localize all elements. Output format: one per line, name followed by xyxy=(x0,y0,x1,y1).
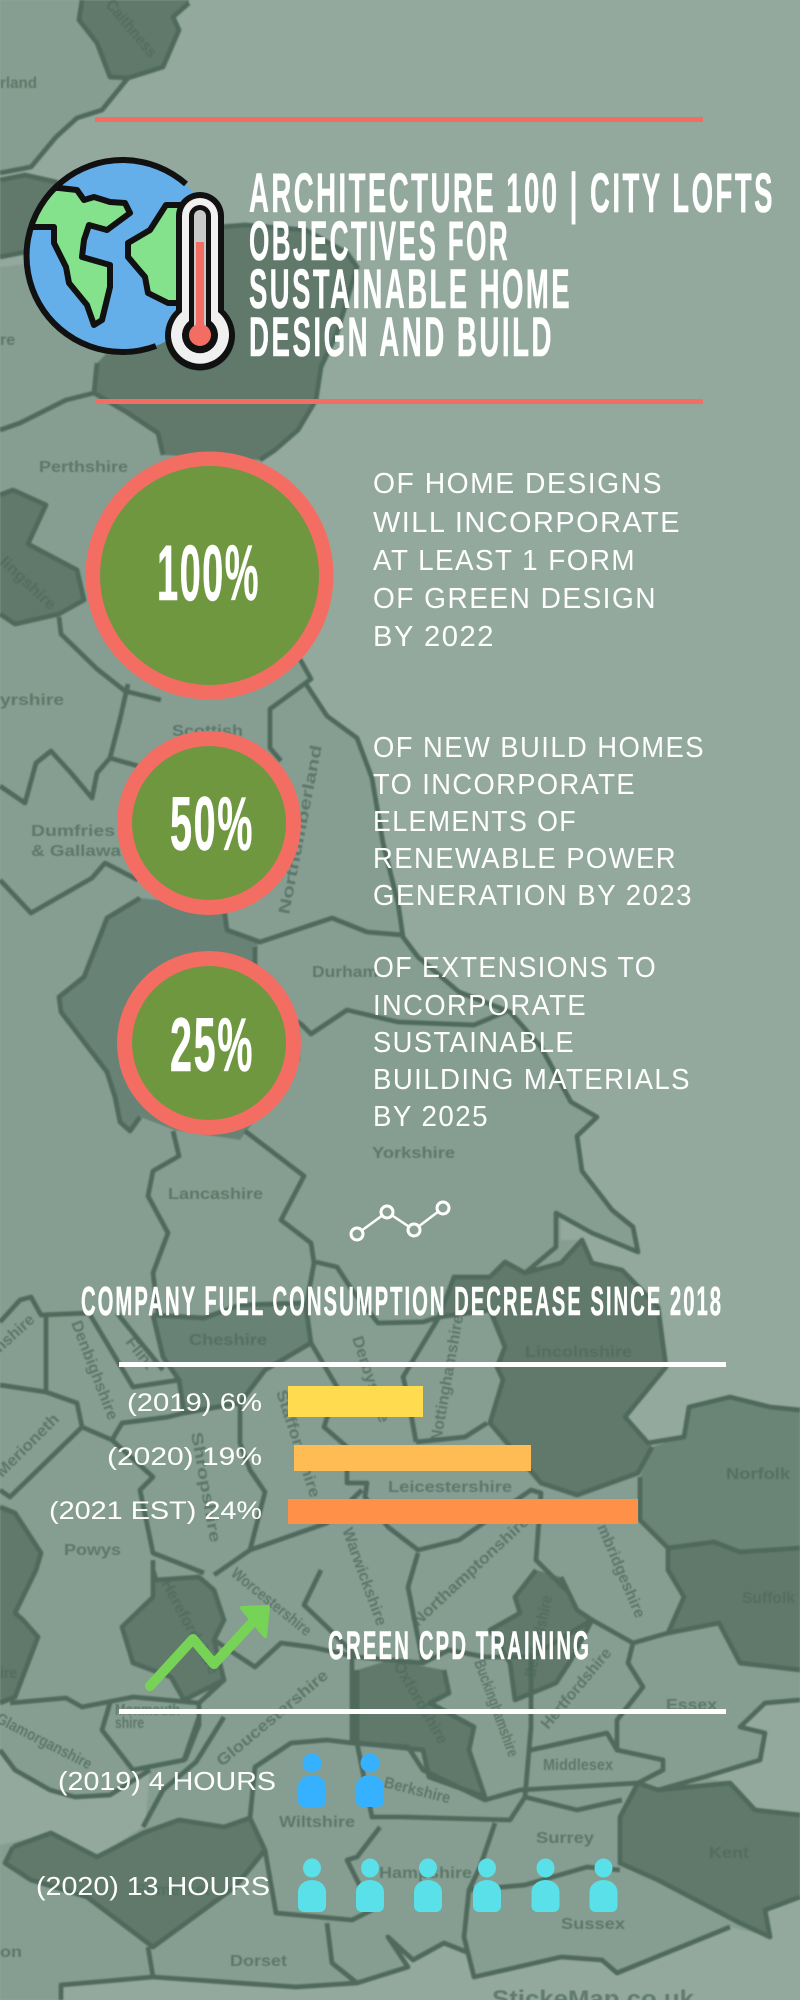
bar label 2021: (2021 EST) 24% xyxy=(49,1497,262,1525)
stat text: 50% xyxy=(373,732,705,912)
map place names: Norfolk xyxy=(726,1466,790,1483)
icon: globe with thermometer xyxy=(20,160,235,370)
bar chart: fuel consumption xyxy=(49,1386,638,1525)
stat text: 50%: TO INCORPORATE xyxy=(373,769,636,801)
stat text: 100%: OF HOME DESIGNS xyxy=(373,468,663,500)
map place names: Northumberland xyxy=(276,744,326,916)
stat text: 25%: OF EXTENSIONS TO xyxy=(373,952,657,984)
bar label 2019: (2019) 6% xyxy=(127,1389,262,1417)
North sea xyxy=(0,0,800,1443)
map place names: Durham xyxy=(312,964,378,981)
map place names: Middlesex xyxy=(543,1757,613,1774)
map place names: Suffolk xyxy=(742,1590,795,1607)
stat text: 25%: INCORPORATE xyxy=(373,990,587,1022)
map place names: Yorkshire xyxy=(372,1145,455,1162)
map place names: Oxfordshire xyxy=(390,1658,451,1748)
icon: line chart xyxy=(351,1202,449,1240)
white divider xyxy=(119,1362,726,1367)
map place names: Flint xyxy=(122,1334,158,1373)
map place names: Derbyshire xyxy=(348,1334,392,1425)
map place names: Kent xyxy=(709,1845,750,1862)
bottom red divider xyxy=(95,399,703,404)
icons: people 2020 xyxy=(298,1858,618,1912)
map place names: Warwickshire xyxy=(338,1526,389,1628)
bar 2019 xyxy=(288,1386,423,1417)
map place names: Lincolnshire xyxy=(525,1344,632,1361)
title: OBJECTIVES FOR xyxy=(249,209,510,272)
map place names: rland xyxy=(0,75,37,92)
map place names: Powys xyxy=(64,1542,121,1559)
map place names: Surrey xyxy=(536,1830,594,1847)
map place names: Essex xyxy=(666,1697,717,1714)
stat circle: 50%: 50% xyxy=(170,782,254,867)
stat text: 50%: ELEMENTS OF xyxy=(373,806,577,838)
stat text: 50%: OF NEW BUILD HOMES xyxy=(373,732,705,764)
stat circle: 25% xyxy=(117,951,301,1135)
map place names: re xyxy=(0,332,15,349)
stat circle: 25%: 25% xyxy=(170,1003,254,1088)
map place names: yrshire xyxy=(0,692,64,709)
stat text: 25%: BY 2025 xyxy=(373,1101,489,1133)
map place names: Buckinghamshire xyxy=(470,1658,521,1759)
icon: rising green arrow xyxy=(150,1607,268,1686)
map place names: Bedfordshire xyxy=(522,1594,556,1679)
map place names: Leicestershire xyxy=(388,1479,512,1496)
stat text: 100%: WILL INCORPORATE xyxy=(373,507,681,539)
map place names: mbridgeshire xyxy=(593,1522,648,1621)
map place names: Hampshire xyxy=(379,1865,472,1882)
map place names: Worcestershire xyxy=(227,1565,314,1640)
map place names: Scottish xyxy=(172,723,243,740)
stat circle: 100%: 100% xyxy=(157,528,260,617)
map place names: Shropshire xyxy=(187,1431,223,1544)
stat circle: 100% xyxy=(86,452,334,700)
stat text: 100% xyxy=(373,468,681,653)
map place names: & Gallawa xyxy=(31,843,121,860)
map place names: Dumfries xyxy=(31,823,115,840)
top red divider xyxy=(95,117,703,122)
map place names: Staffordshire xyxy=(272,1388,323,1500)
stat text: 100%: OF GREEN DESIGN xyxy=(373,583,657,615)
label: 2020 hours: (2020) 13 HOURS xyxy=(36,1871,270,1901)
map place names: Northamptonshire xyxy=(409,1513,533,1630)
map place names: Monmouth xyxy=(115,1702,180,1719)
stat text: 50%: RENEWABLE POWER xyxy=(373,843,677,875)
map place names: shire xyxy=(115,1715,144,1732)
map place names: Lancashire xyxy=(168,1186,263,1203)
title xyxy=(249,161,775,368)
icons: people 2019 xyxy=(298,1754,384,1807)
sea patches xyxy=(0,1750,150,1857)
map place names: Nottinghamshire xyxy=(428,1314,467,1443)
stat text: 100%: BY 2022 xyxy=(373,621,495,653)
stat text: 25%: BUILDING MATERIALS xyxy=(373,1064,691,1096)
bar label 2020: (2020) 19% xyxy=(107,1443,262,1471)
map place names: Denbighshire xyxy=(67,1318,121,1423)
stat text: 25% xyxy=(373,952,691,1133)
map place names: Dorset xyxy=(230,1953,288,1970)
stat text: 100%: AT LEAST 1 FORM xyxy=(373,545,636,577)
bar 2020 xyxy=(294,1445,531,1471)
map place names: Gloucestershire xyxy=(214,1667,332,1770)
map place names: Perthshire xyxy=(39,459,128,476)
stat text: 50%: GENERATION BY 2023 xyxy=(373,880,693,912)
map place names: Berkshire xyxy=(382,1774,452,1807)
map place names: Cheshire xyxy=(189,1332,267,1349)
stat text: 25%: SUSTAINABLE xyxy=(373,1027,575,1059)
map place names: on xyxy=(0,1944,22,1961)
label: 2019 hours: (2019) 4 HOURS xyxy=(58,1766,276,1796)
stat circle: 50% xyxy=(117,731,301,915)
map place names: Wiltshire xyxy=(279,1814,355,1831)
map place names: Somerset xyxy=(135,1882,211,1899)
bar 2021 xyxy=(288,1499,638,1524)
map place names: Hertfordshire xyxy=(538,1645,615,1733)
map place names: ire xyxy=(0,1665,17,1682)
map place names: Sussex xyxy=(561,1916,625,1933)
map place names: Herefordshire xyxy=(157,1577,222,1678)
white divider xyxy=(119,1709,726,1714)
